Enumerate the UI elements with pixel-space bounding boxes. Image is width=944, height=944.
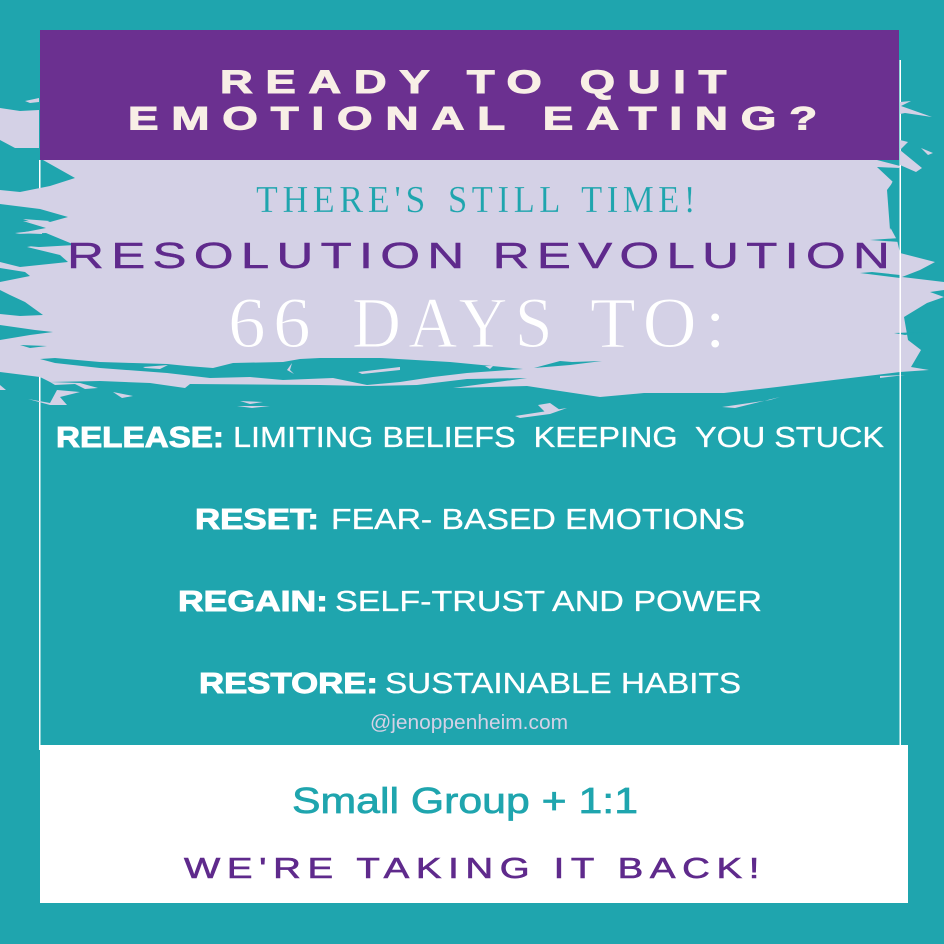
subheading: there's still time: STILL	[448, 179, 565, 221]
website handle: @jenoppenheim.com	[370, 712, 568, 734]
thin white frame	[39, 60, 901, 750]
lower brush flecks	[28, 390, 80, 405]
step: restore	[199, 668, 741, 700]
teal tears in the left of the brush	[0, 204, 75, 267]
step: reset: FEAR- BASED EMOTIONS	[331, 504, 745, 536]
brush stroke banner	[0, 98, 944, 418]
step: release	[56, 422, 884, 454]
step: release: RELEASE:	[56, 422, 224, 454]
closing line: WE'RE TAKING IT BACK!	[184, 853, 766, 885]
format line: Small Group + 1:1	[292, 780, 638, 821]
long teal tear along the bottom of the brush	[40, 358, 523, 385]
step: reset: RESET:	[195, 504, 319, 536]
66 days heading: 66	[228, 283, 318, 363]
heading: EMOTIONAL EATING?	[128, 100, 830, 136]
program name: RESOLUTION REVOLUTION	[67, 235, 897, 276]
subheading: there's still time: THERE'S	[256, 179, 430, 221]
subheading: there's still time: TIME!	[581, 179, 700, 221]
bottom white panel	[40, 745, 908, 903]
subheading: there's still time	[256, 179, 700, 221]
step: regain	[178, 586, 762, 618]
heading: READY TO QUIT	[220, 64, 739, 100]
step: reset	[195, 504, 745, 536]
white frame over brush, right side	[900, 165, 901, 395]
66 days heading: TO:	[590, 283, 734, 363]
step: regain: REGAIN:	[178, 586, 328, 618]
step: restore: RESTORE:	[199, 668, 378, 700]
teal tears in the right of the brush	[877, 167, 900, 230]
66 days heading	[228, 283, 734, 363]
step: restore: SUSTAINABLE HABITS	[385, 668, 741, 700]
step: regain: SELF-TRUST AND POWER	[335, 586, 762, 618]
teal tear with sliver, upper right of stripe	[534, 361, 602, 368]
heading	[128, 64, 830, 136]
list of four steps	[56, 422, 884, 700]
66 days heading: DAYS	[352, 283, 560, 363]
header band	[40, 30, 899, 160]
step: release: LIMITING BELIEFS KEEPING YOU STUCK	[233, 422, 884, 454]
